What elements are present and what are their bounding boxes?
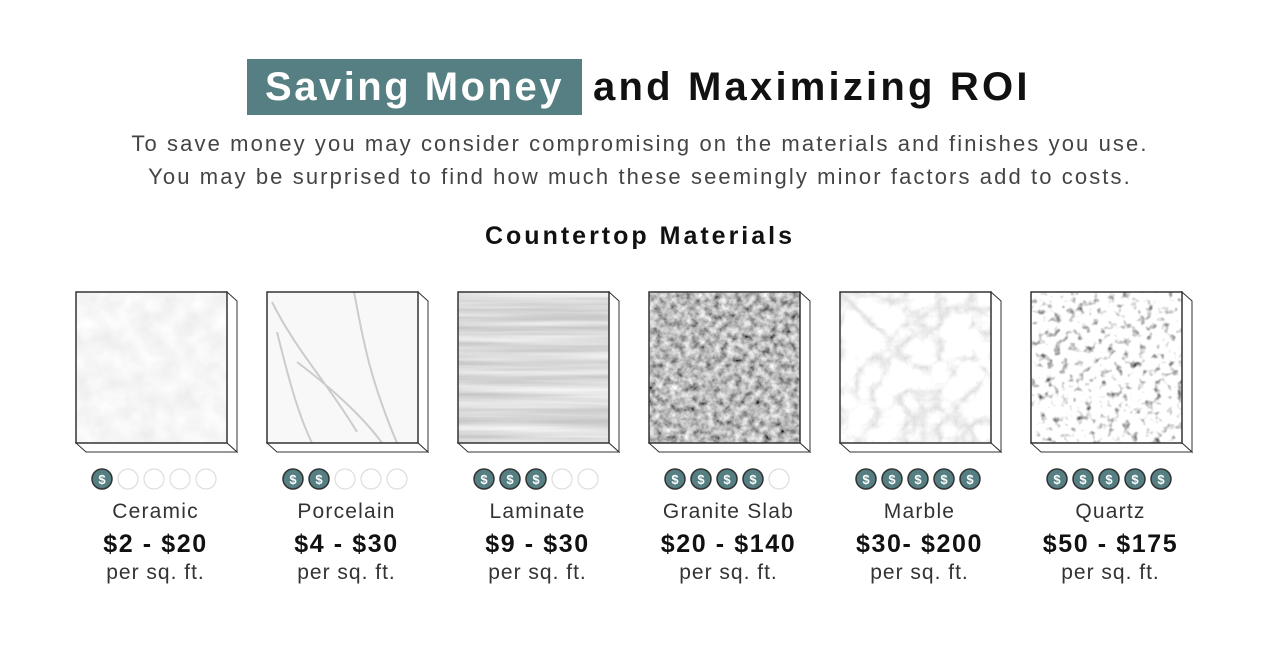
label: ceramic	[103, 500, 208, 584]
tile: marble	[840, 292, 1001, 452]
text: per sq. ft.	[106, 561, 205, 584]
section heading: Countertop Materials	[485, 222, 795, 250]
text: $2 - $20	[103, 530, 208, 558]
rating: granite 4	[665, 469, 789, 489]
label: porcelain	[294, 500, 399, 584]
text: Granite Slab	[663, 500, 794, 523]
subtitle	[131, 131, 1149, 189]
label: marble	[856, 500, 983, 584]
title rest: and Maximizing ROI	[593, 65, 1031, 109]
title	[247, 59, 1031, 115]
text: Ceramic	[112, 500, 199, 523]
text: per sq. ft.	[679, 561, 778, 584]
rating: porcelain 2	[283, 469, 407, 489]
subtitle: You may be surprised to find how much these seemingly minor factors add to costs.	[148, 164, 1132, 189]
text: Quartz	[1075, 500, 1146, 523]
text: Porcelain	[297, 500, 396, 523]
text: $9 - $30	[485, 530, 590, 558]
subtitle: To save money you may consider compromising on the materials and finishes you use.	[131, 131, 1149, 156]
text: per sq. ft.	[1061, 561, 1160, 584]
rating: marble 5	[856, 469, 980, 489]
text: $20 - $140	[661, 530, 796, 558]
text: $30- $200	[856, 530, 983, 558]
label: laminate	[485, 500, 590, 584]
text: Marble	[884, 500, 955, 523]
title highlight box: Saving Money	[265, 65, 564, 109]
text: per sq. ft.	[297, 561, 396, 584]
tile: laminate	[458, 292, 619, 452]
text: $4 - $30	[294, 530, 399, 558]
tile: quartz	[1031, 292, 1192, 452]
tile: porcelain	[267, 292, 428, 452]
rating: ceramic 1	[92, 469, 216, 489]
tile: granite	[649, 292, 810, 452]
rating: laminate 3	[474, 469, 598, 489]
text: Laminate	[490, 500, 586, 523]
tile: ceramic	[76, 292, 237, 452]
text: $50 - $175	[1043, 530, 1178, 558]
text: per sq. ft.	[488, 561, 587, 584]
label: quartz	[1043, 500, 1178, 584]
text: per sq. ft.	[870, 561, 969, 584]
label: granite	[661, 500, 796, 584]
rating: quartz 5	[1047, 469, 1171, 489]
